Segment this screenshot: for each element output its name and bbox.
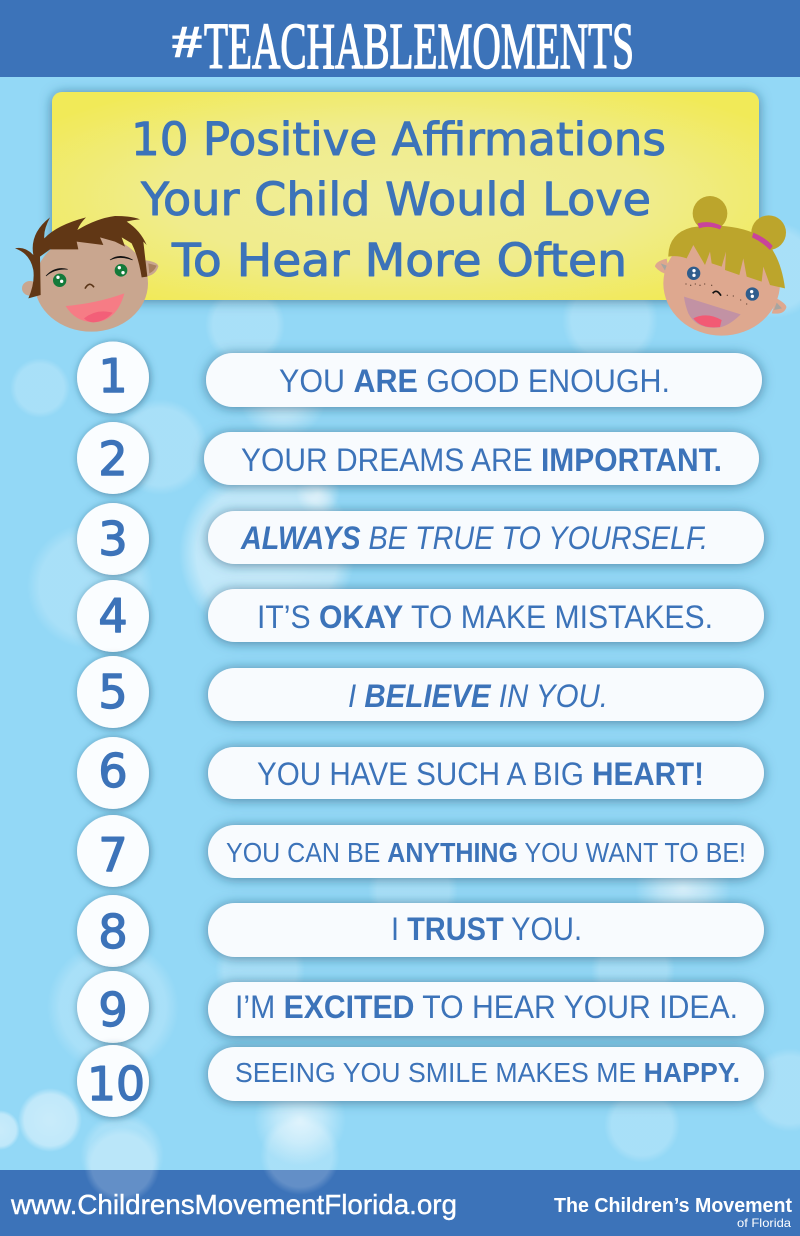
title hashtag [172,10,634,83]
affirmation 6 [208,747,764,799]
affirmation 3 [208,511,764,564]
affirmation 5 [208,668,764,721]
affirmation 9 [208,982,764,1036]
number 10 badge: 10 [87,1057,145,1111]
number 8 badge [77,895,149,967]
affirmation 8: I TRUST YOU. [391,911,582,947]
affirmation 2 [204,432,759,485]
number 2 badge [77,422,149,494]
affirmation 8 [208,903,764,957]
affirmation 7 [208,825,764,878]
number 9 badge [77,971,149,1043]
heading line 1: 10 Positive Affirmations [131,113,666,166]
number 7 badge: 7 [98,828,128,882]
number 2 badge: 2 [98,432,128,486]
number 5 badge: 5 [98,665,128,719]
title hashtag: # [172,16,202,67]
icon: boy face [15,216,158,332]
number 8 badge: 8 [98,905,128,959]
organization logo text: The Children’s Movement [554,1195,792,1217]
affirmation 10 [208,1047,764,1101]
number 7 badge [77,815,149,887]
affirmation 5: I BELIEVE IN YOU. [348,678,608,714]
number 1 badge [77,342,149,414]
affirmation 4 [208,589,764,642]
number 1 badge: 1 [98,349,128,403]
affirmation 9: I’M EXCITED TO HEAR YOUR IDEA. [235,989,738,1025]
organization logo subline: of Florida [737,1216,791,1230]
number 3 badge: 3 [98,512,128,566]
header band [0,0,800,83]
affirmation 1 [206,353,762,407]
number 6 badge [77,737,149,809]
number 10 badge [77,1045,149,1117]
number 4 badge [77,580,149,652]
heading line 3: To Hear More Often [171,234,627,287]
affirmation 7: YOU CAN BE ANYTHING YOU WANT TO BE! [226,837,746,868]
affirmation 2: YOUR DREAMS ARE IMPORTANT. [241,442,722,478]
footer band [0,1115,800,1236]
panel: yellow heading card [52,92,759,300]
number 4 badge: 4 [98,589,128,643]
number 5 badge [77,656,149,728]
affirmation 10: SEEING YOU SMILE MAKES ME HAPPY. [235,1057,740,1088]
affirmation 3: ALWAYS BE TRUE TO YOURSELF. [240,520,708,556]
number 6 badge: 6 [98,744,128,798]
number 3 badge [77,503,149,575]
affirmation 1: YOU ARE GOOD ENOUGH. [279,363,670,399]
affirmation 6: YOU HAVE SUCH A BIG HEART! [257,756,704,792]
icon: girl face [655,196,786,336]
heading line 2: Your Child Would Love [140,173,651,226]
number 9 badge: 9 [98,983,128,1037]
website url: www.ChildrensMovementFlorida.org [10,1189,457,1220]
affirmation 4: IT’S OKAY TO MAKE MISTAKES. [257,599,713,635]
